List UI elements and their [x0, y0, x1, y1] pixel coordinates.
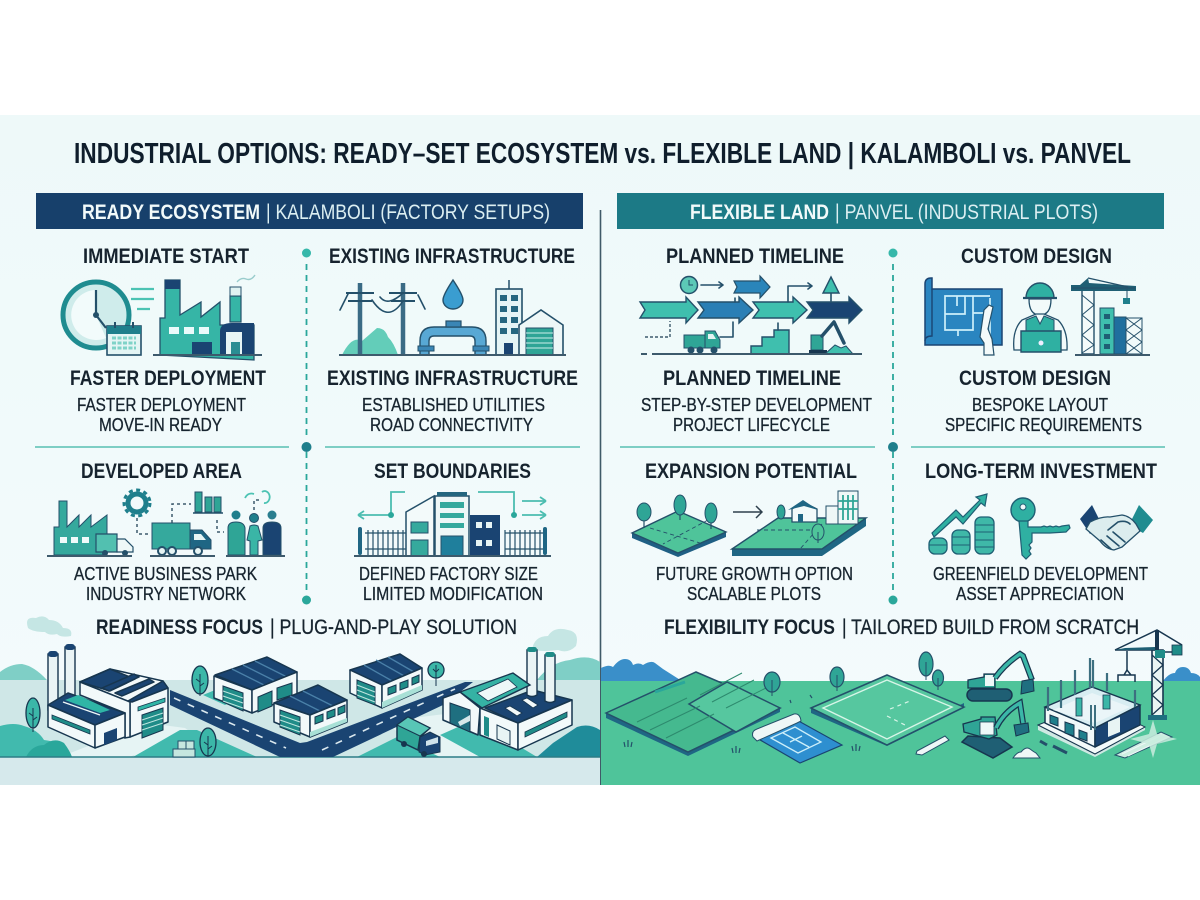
cell: custom design: SPECIFIC REQUIREMENTS [945, 414, 1142, 435]
tower crane [1115, 630, 1182, 720]
cell: existing infrastructure: ESTABLISHED UTILITIES [362, 394, 545, 415]
focus heading left [96, 616, 517, 639]
cell: long-term investment: LONG-TERM INVESTMENT [925, 460, 1157, 483]
trees [26, 662, 444, 757]
focus heading right: | TAILORED BUILD FROM SCRATCH [842, 616, 1139, 639]
grid dividers right [620, 248, 1165, 604]
cell: expansion potential: SCALABLE PLOTS [687, 583, 821, 604]
building under construction [1038, 658, 1145, 757]
header: ready ecosystem [36, 193, 583, 229]
scene: industrial park with road and factories [0, 616, 600, 785]
cell: expansion potential: EXPANSION POTENTIAL [645, 460, 857, 483]
cell: existing infrastructure: EXISTING INFRASTRUCTURE [329, 245, 575, 268]
smoke clouds [27, 616, 577, 651]
icon: coins, growth arrow, key and handshake [929, 494, 1153, 559]
ground patches [60, 714, 520, 757]
cell: expansion potential [632, 460, 866, 604]
icon: factory within fenced boundary [354, 492, 551, 556]
plot with outline [811, 675, 964, 746]
grid dividers left [35, 248, 580, 604]
cell: developed area [47, 460, 285, 604]
header: flexible land [617, 193, 1164, 229]
cell: existing infrastructure [327, 245, 578, 435]
hills [601, 659, 1200, 683]
icon: factory, truck, network and people [47, 490, 285, 556]
focus heading left: READINESS FOCUS [96, 616, 263, 639]
cell: planned timeline: PROJECT LIFECYCLE [673, 414, 830, 435]
cell: existing infrastructure: ROAD CONNECTIVITY [370, 414, 533, 435]
pencil, tools, stone, ruler and sparkle [916, 720, 1177, 758]
excavator lower [962, 703, 1029, 758]
panel: ready ecosystem, Kalamboli [0, 193, 600, 785]
header: flexible land: | PANVEL (INDUSTRIAL PLOTS) [835, 201, 1098, 224]
excavator upper [967, 654, 1034, 701]
focus heading right: FLEXIBILITY FOCUS [664, 616, 835, 639]
cell: custom design: CUSTOM DESIGN [959, 367, 1111, 390]
cell: planned timeline: PLANNED TIMELINE [663, 367, 841, 390]
header: flexible land: FLEXIBLE LAND [690, 201, 829, 224]
left factory [48, 644, 168, 748]
cell: set boundaries: SET BOUNDARIES [374, 460, 531, 483]
cell: immediate start: FASTER DEPLOYMENT [77, 394, 246, 415]
cell: expansion potential: FUTURE GROWTH OPTION [656, 563, 853, 584]
icon: empty plot growing into developed plot [632, 491, 866, 557]
blueprint roll [752, 714, 842, 763]
warehouse B [274, 685, 347, 737]
icon: clock, calendar and factory [63, 275, 262, 360]
icon: utilities, pipe and buildings [339, 280, 566, 355]
cell: long-term investment [925, 460, 1157, 604]
cell: custom design [925, 245, 1150, 435]
grass tufts [624, 695, 860, 753]
header: ready ecosystem: | KALAMBOLI (FACTORY SETUPS) [266, 201, 550, 224]
focus heading left: | PLUG-AND-PLAY SOLUTION [270, 616, 517, 639]
panel: background [0, 115, 1200, 785]
hills and pale ground band [0, 657, 600, 680]
cell: set boundaries: DEFINED FACTORY SIZE [359, 563, 538, 584]
cell: custom design: BESPOKE LAYOUT [972, 394, 1108, 415]
cell: existing infrastructure: EXISTING INFRASTRUCTURE [327, 367, 578, 390]
warehouse C [350, 654, 422, 708]
divider: center line [600, 210, 602, 785]
cell: developed area: ACTIVE BUSINESS PARK [74, 563, 258, 584]
cell: planned timeline: STEP-BY-STEP DEVELOPMENT [641, 394, 872, 415]
truck on road [397, 717, 440, 757]
cell: planned timeline [640, 245, 872, 435]
plot with subdivisions [606, 672, 780, 756]
focus heading right [664, 616, 1139, 639]
cell: immediate start: MOVE-IN READY [99, 414, 222, 435]
cell: planned timeline: PLANNED TIMELINE [666, 245, 844, 268]
cell: immediate start: FASTER DEPLOYMENT [70, 367, 266, 390]
right factory [443, 647, 572, 750]
panel: flexible land, Panvel [601, 193, 1200, 785]
scene: open land with plots, excavators and construction [601, 630, 1200, 785]
header: ready ecosystem: READY ECOSYSTEM [82, 201, 260, 224]
cell: custom design: CUSTOM DESIGN [961, 245, 1112, 268]
cell: long-term investment: GREENFIELD DEVELOPMENT [933, 563, 1148, 584]
cell: immediate start [63, 245, 266, 435]
icon: blueprint, engineer and crane [925, 278, 1150, 355]
cell: developed area: INDUSTRY NETWORK [86, 583, 247, 604]
trees right [764, 652, 944, 696]
cell: set boundaries: LIMITED MODIFICATION [363, 583, 543, 604]
cell: developed area: DEVELOPED AREA [81, 460, 242, 483]
cell: immediate start: IMMEDIATE START [83, 245, 249, 268]
icon: timeline arrows with vehicles [640, 276, 862, 354]
warehouse A [214, 657, 297, 713]
green ground [601, 681, 1200, 785]
cell: set boundaries [354, 460, 551, 604]
road [170, 682, 473, 757]
cell: long-term investment: ASSET APPRECIATION [956, 583, 1124, 604]
